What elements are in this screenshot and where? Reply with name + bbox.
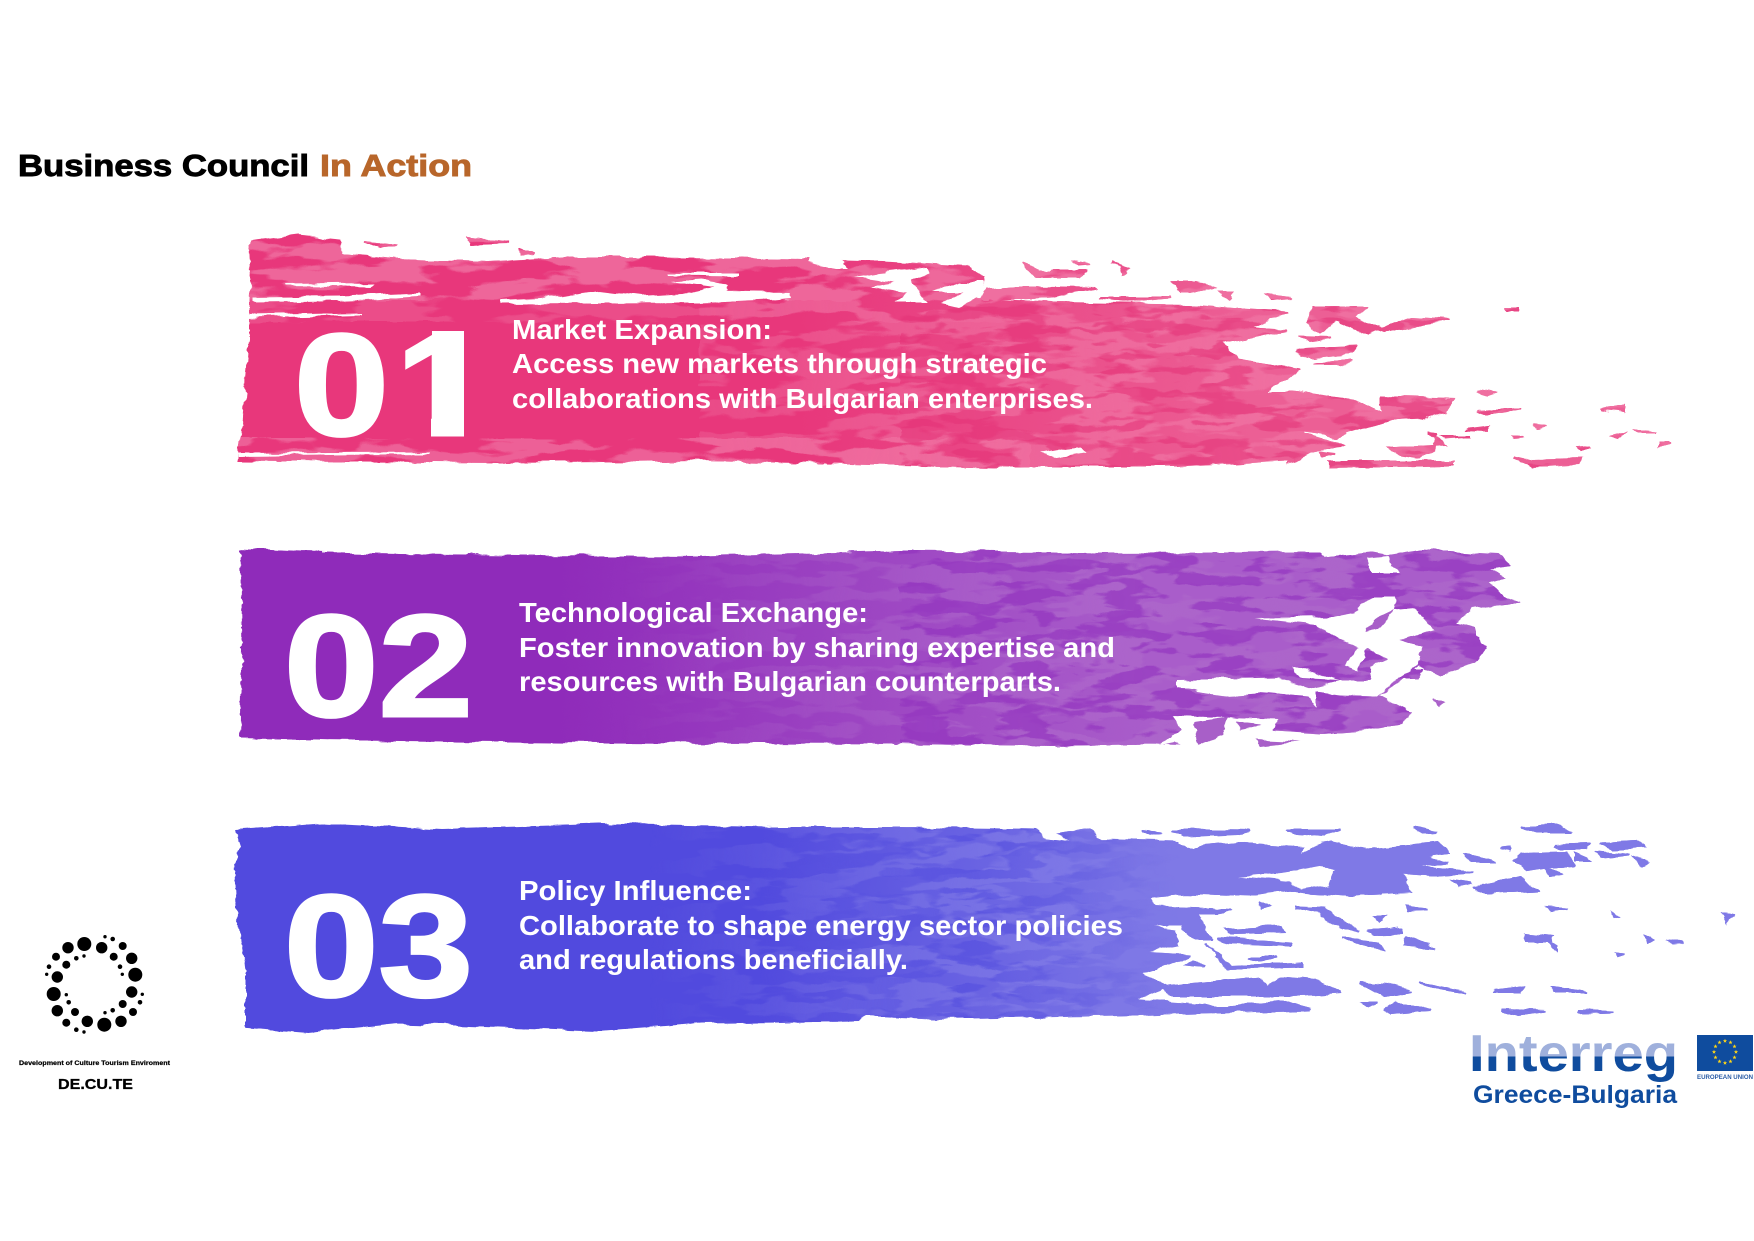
panel: 01 market expansion (230, 230, 1700, 470)
logo: Interreg Greece-Bulgaria (1469, 1025, 1754, 1109)
text: policy influence: and regulations beneficially. (519, 944, 908, 975)
text: technological exchange: Foster innovation by sharing expertise and (519, 632, 1115, 663)
text: market expansion: Access new markets through strategic (512, 348, 1047, 379)
text: market expansion: collaborations with Bulgarian enterprises. (512, 383, 1093, 414)
number 03: 03 (284, 865, 473, 1027)
text: policy influence (519, 875, 1123, 975)
text: policy influence: Policy Influence: (519, 875, 752, 906)
Interreg wordmark: Interreg (1469, 1025, 1678, 1083)
text: technological exchange: resources with Bulgarian counterparts. (519, 666, 1061, 697)
text: market expansion: Market Expansion: (512, 314, 772, 345)
blue brush stroke (230, 815, 1748, 1035)
text: market expansion (512, 314, 1093, 414)
EU label: EUROPEAN UNION (1697, 1074, 1754, 1081)
number 01: 0 (294, 304, 389, 466)
title (18, 149, 472, 183)
icon: dotted circle (45, 935, 144, 1034)
text: technological exchange: Technological Exchange: (519, 597, 868, 628)
logo tagline: Development of Culture Tourism Enviroment (19, 1061, 170, 1067)
text: technological exchange (519, 597, 1115, 697)
Greece-Bulgaria wordmark: Greece-Bulgaria (1473, 1081, 1678, 1109)
panel: 02 technological exchange (230, 540, 1530, 750)
number 02: 02 (284, 585, 473, 747)
panel: 03 policy influence (230, 815, 1748, 1035)
icon: EU flag (1697, 1035, 1753, 1071)
purple brush stroke (230, 540, 1530, 750)
logo wordmark: DE.CU.TE (58, 1076, 133, 1093)
number 01 (299, 331, 464, 438)
title: Business Council (18, 149, 309, 183)
logo: DE.CU.TE (19, 935, 170, 1093)
text: policy influence: Collaborate to shape energy sector policies (519, 910, 1123, 941)
number 01: 1 (396, 304, 485, 466)
infographic canvas (19, 154, 1753, 1108)
title: In Action (320, 149, 472, 183)
pink brush stroke (230, 230, 1700, 470)
